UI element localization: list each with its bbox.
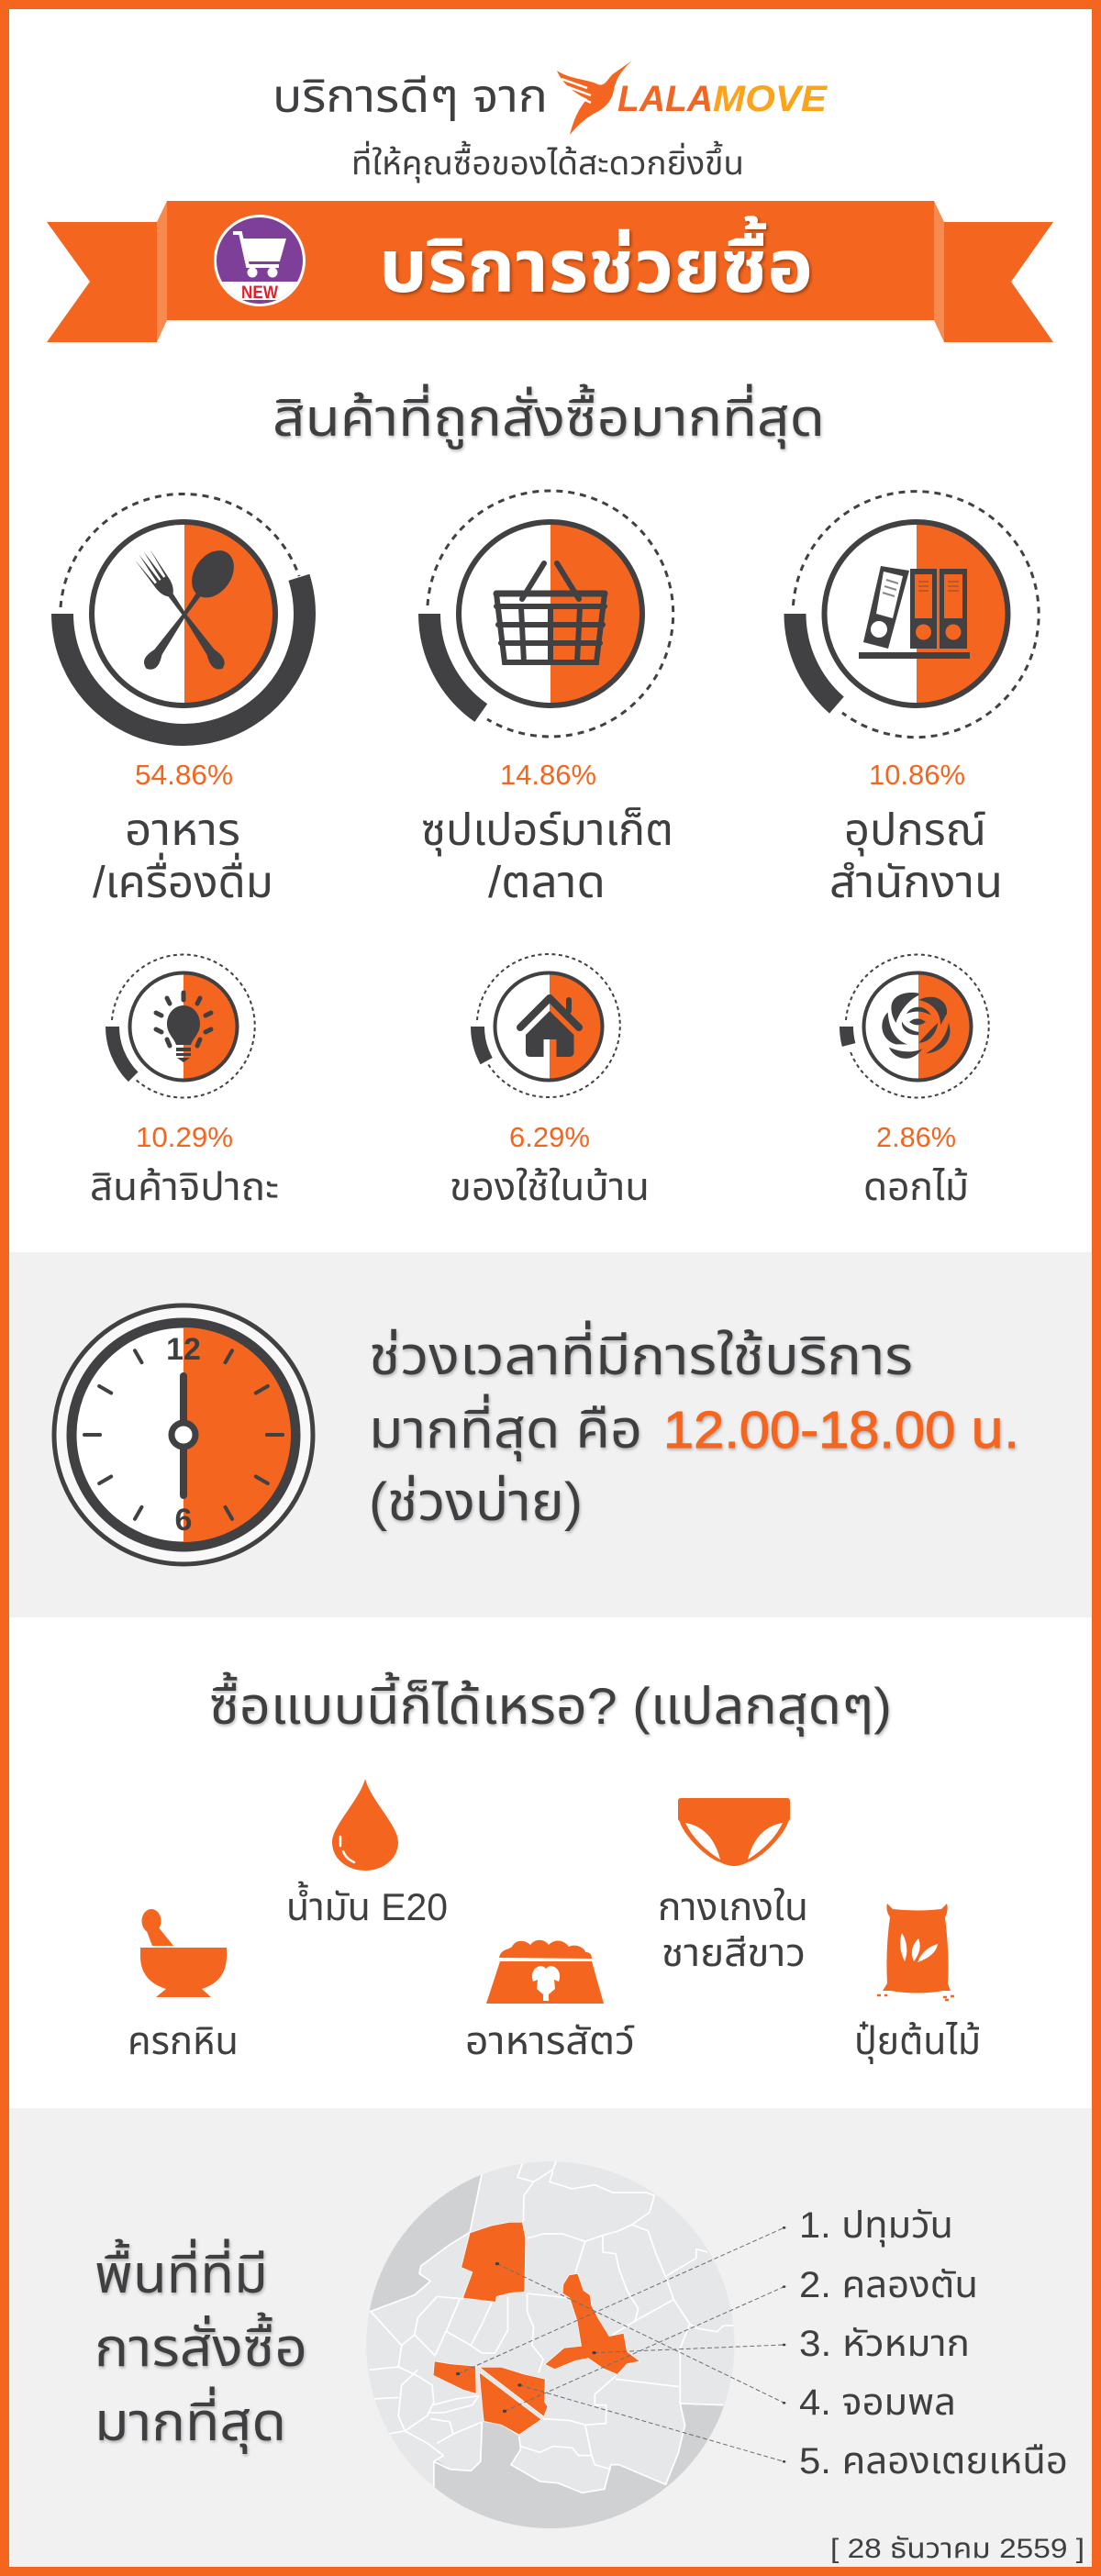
subtitle: ที่ให้คุณซื้อของได้สะดวกยิ่งขึ้น	[351, 140, 744, 183]
title line: บริการดีๆ จาก	[272, 71, 548, 122]
text: peak hours: 12.00-18.00 น.	[663, 1401, 1019, 1460]
icon: basket	[496, 563, 605, 662]
category: food and drink: /เครื่องดื่ม	[93, 852, 273, 907]
category: office supplies: สำนักงาน	[829, 859, 1003, 907]
category: household goods: ของใช้ในบ้าน	[450, 1165, 650, 1208]
icon: clock	[54, 1305, 313, 1564]
leader lines	[458, 2227, 784, 2461]
panel: top areas background	[9, 2108, 1092, 2567]
category: miscellaneous goods	[90, 955, 279, 1208]
icon: new cart badge	[211, 215, 308, 306]
icon: clock: 6	[175, 1503, 192, 1538]
item: E20 fuel	[286, 1779, 448, 1928]
heading: top order areas: พื้นที่ที่มี	[95, 2238, 268, 2304]
category: office supplies	[793, 492, 1039, 907]
text: peak hours	[369, 1320, 1019, 1532]
item: pet food	[465, 1940, 635, 2062]
map: Bangkok districts	[367, 2161, 785, 2528]
list: top districts	[799, 2205, 1068, 2482]
category: food and drink: 54.86%	[135, 759, 233, 791]
item: white underwear: กางเกงใน	[658, 1885, 808, 1928]
item: white underwear	[658, 1798, 808, 1974]
category: flowers	[846, 955, 989, 1208]
icon: binders	[859, 566, 970, 659]
text: peak hours: (ช่วงบ่าย)	[369, 1472, 583, 1532]
ribbon banner	[47, 201, 1053, 342]
item: white underwear: ชายสีขาว	[662, 1931, 806, 1974]
item: pet food: อาหารสัตว์	[465, 2019, 635, 2062]
heading: top order areas	[95, 2238, 307, 2454]
item: mortar and pestle: ครกหิน	[128, 2019, 239, 2062]
logo: Lalamove: LALA	[617, 79, 713, 119]
date note: [ 28 ธันวาคม 2559 ]	[830, 2534, 1084, 2564]
category: office supplies: 10.86%	[869, 759, 965, 791]
item: mortar and pestle	[128, 1909, 239, 2062]
category: supermarket: 14.86%	[500, 759, 596, 791]
icon: rose	[882, 993, 951, 1059]
category: flowers: 2.86%	[876, 1121, 956, 1153]
icon: house	[520, 997, 579, 1057]
logo: Lalamove: MOVE	[713, 79, 828, 119]
category: household goods	[450, 954, 650, 1208]
text: peak hours: มากที่สุด คือ	[369, 1393, 642, 1461]
icon: fork and spoon	[131, 542, 242, 679]
list: top districts: 3. หัวหมาก	[799, 2324, 970, 2364]
category: office supplies: อุปกรณ์	[844, 806, 986, 857]
banner title: บริการช่วยซื้อ	[379, 216, 813, 307]
category: household goods: 6.29%	[509, 1121, 590, 1153]
heading: top products: สินค้าที่ถูกสั่งซื้อมากที่สุด	[272, 383, 825, 450]
category: flowers: ดอกไม้	[863, 1165, 969, 1208]
heading: top order areas: มากที่สุด	[95, 2386, 286, 2454]
highlighted districts	[433, 2222, 639, 2435]
icon: clock: 12	[166, 1332, 201, 1367]
panel: delivery time background	[9, 1252, 1092, 1617]
category: food and drink	[61, 494, 305, 907]
item: fertilizer bag	[854, 1904, 981, 2064]
text: peak hours: ช่วงเวลาที่มีการใช้บริการ	[369, 1320, 913, 1386]
list: top districts: 4. จอมพล	[799, 2382, 956, 2423]
list: top districts: 5. คลองเตยเหนือ	[799, 2441, 1068, 2482]
icon: new cart badge: NEW	[241, 283, 278, 303]
heading: strange purchases: ซื้อแบบนี้ก็ได้เหรอ? (แปลกสุดๆ)	[209, 1671, 892, 1737]
category: supermarket: /ตลาด	[488, 859, 606, 907]
category: food and drink: อาหาร	[125, 806, 240, 855]
heading: top order areas: การสั่งซื้อ	[95, 2312, 307, 2378]
category: miscellaneous goods: 10.29%	[136, 1121, 233, 1153]
item: fertilizer bag: ปุ๋ยต้นไม้	[854, 2019, 981, 2064]
icon: light bulb	[156, 993, 211, 1062]
category: supermarket	[421, 491, 673, 907]
item: E20 fuel: น้ำมัน E20	[286, 1881, 448, 1928]
list: top districts: 1. ปทุมวัน	[799, 2205, 953, 2247]
category: supermarket: ซุปเปอร์มาเก็ต	[421, 806, 673, 857]
logo: Lalamove	[557, 61, 828, 135]
list: top districts: 2. คลองตัน	[799, 2265, 978, 2305]
category: miscellaneous goods: สินค้าจิปาถะ	[90, 1165, 279, 1208]
